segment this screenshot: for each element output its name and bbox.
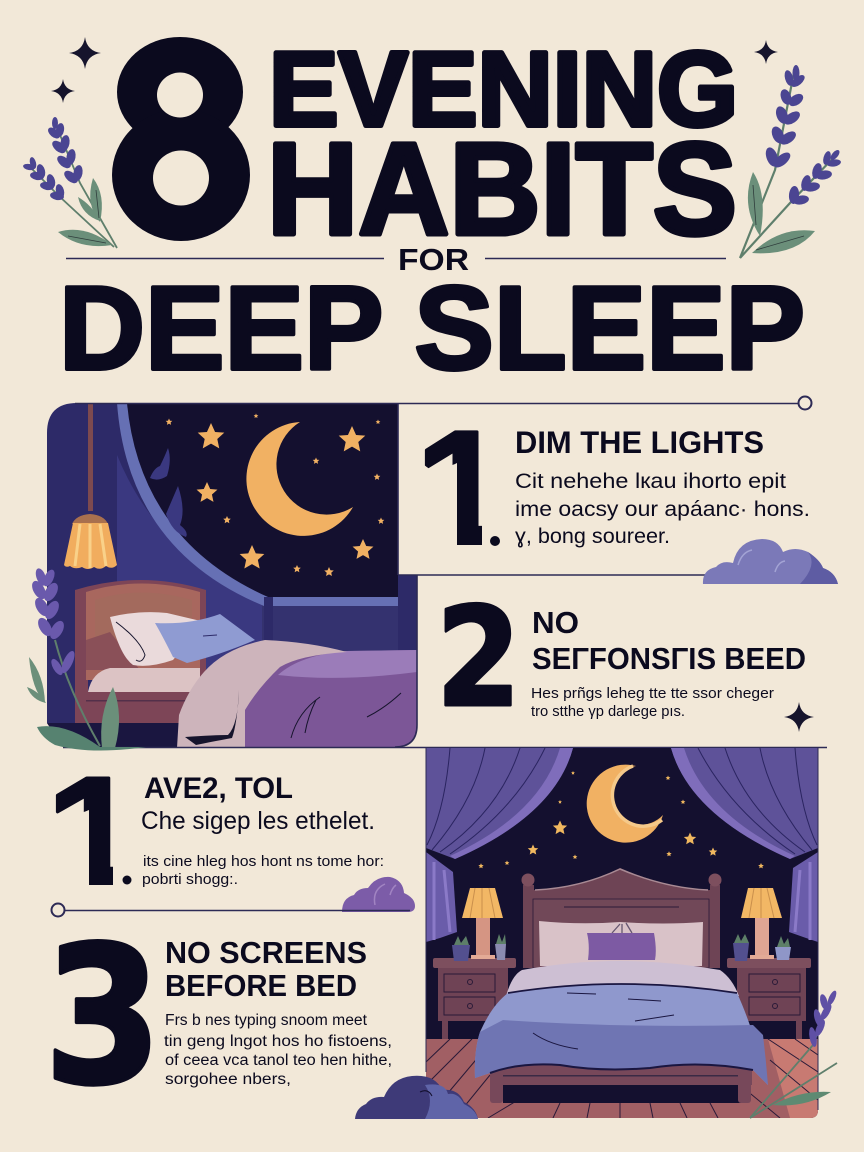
body copy: tin geng lngot hos ho fistoens, bbox=[164, 1033, 392, 1050]
mattress bbox=[88, 668, 200, 692]
title word evening: EVENING bbox=[269, 30, 738, 148]
body copy bbox=[515, 470, 810, 548]
bed frame bbox=[490, 1065, 752, 1103]
heading: DIM THE LIGHTS bbox=[515, 424, 764, 460]
body copy: ɣ, bong soureer. bbox=[515, 525, 670, 548]
stars bbox=[478, 771, 764, 868]
heading: NO bbox=[532, 605, 579, 640]
floor bbox=[426, 1039, 818, 1119]
hanging lamp bbox=[64, 403, 117, 569]
panel: habit 2 bbox=[436, 579, 806, 738]
subheading: Che sigep les ethelet. bbox=[141, 807, 375, 835]
night sky bbox=[426, 748, 818, 1120]
moon bbox=[246, 422, 353, 536]
heading: BEFORE BED bbox=[165, 968, 357, 1003]
title numeral 8: 8 bbox=[108, 0, 253, 291]
body copy bbox=[142, 853, 384, 888]
pillows bbox=[539, 921, 703, 966]
left curtain bbox=[426, 748, 573, 942]
icon: sparkle bbox=[784, 702, 814, 732]
heading bbox=[532, 605, 806, 676]
numeral 3: 3 bbox=[44, 906, 162, 1127]
potted plants bbox=[452, 934, 791, 961]
panel: habit 3 no screens before bed bbox=[44, 906, 392, 1127]
panel: habit 1 dim the lights bbox=[424, 430, 808, 548]
panel: bedroom illustration with curtains bbox=[426, 748, 818, 1120]
sparkles top bbox=[51, 37, 778, 103]
right curtain bbox=[671, 748, 818, 942]
silhouette birds bbox=[150, 448, 170, 480]
numeral 1: 1 bbox=[415, 396, 508, 579]
panel outline bbox=[395, 403, 417, 747]
body copy: ime oacsy our apáanc· hons. bbox=[515, 498, 810, 521]
icon: blue cloud bbox=[703, 539, 838, 584]
icon: purple cloud bbox=[342, 877, 415, 912]
body copy: its cine hleg hos hont ns tome hor: bbox=[143, 853, 384, 870]
icon: lavender top left bbox=[23, 117, 117, 248]
icon: lavender bottom right bbox=[750, 989, 838, 1118]
body copy bbox=[164, 1012, 392, 1088]
white pillow bbox=[110, 612, 205, 666]
icon: dark cloud bbox=[355, 1076, 478, 1119]
title bbox=[59, 0, 805, 395]
numeral 1: 1 bbox=[46, 745, 140, 917]
right lamp bbox=[741, 888, 782, 959]
purple blanket bbox=[245, 650, 417, 748]
panel: bedroom illustration with crescent moon bbox=[47, 403, 418, 748]
icon: lavender panel corner bbox=[27, 567, 146, 751]
night sky bbox=[122, 403, 398, 597]
numeral 2: 2 bbox=[436, 579, 521, 738]
body copy: of ceea vca tanol teo hen hithe, bbox=[165, 1052, 392, 1069]
right nightstand bbox=[727, 958, 811, 1039]
icon: lavender top right bbox=[740, 65, 842, 258]
connector node top bbox=[798, 396, 812, 410]
stars bbox=[166, 414, 384, 576]
heading: AVE2, TOL bbox=[144, 772, 293, 805]
body copy bbox=[531, 685, 774, 720]
heading: NO SCREENS bbox=[165, 935, 367, 970]
connector node bottom bbox=[52, 904, 64, 916]
title words deep sleep: DEEP SLEEP bbox=[59, 262, 805, 395]
left nightstand bbox=[433, 958, 516, 1039]
panel: habit with garbled heading bbox=[56, 776, 383, 887]
heading bbox=[165, 935, 367, 1003]
blue pillow bbox=[155, 614, 255, 663]
body copy: Cit nehehe lкau ihorto epit bbox=[515, 470, 786, 493]
blue quilt bbox=[475, 984, 768, 1085]
body copy: tro stthe γp darlege pıs. bbox=[531, 703, 685, 720]
left lamp bbox=[462, 888, 503, 959]
cream blanket bbox=[177, 640, 347, 748]
panel edges bbox=[426, 748, 818, 1110]
headboard bbox=[522, 868, 722, 968]
numeral dot bbox=[122, 876, 132, 884]
body copy: Frs b nes typing snoom meet bbox=[165, 1012, 368, 1029]
heading: SEΓFONSΓIS BEED bbox=[532, 641, 806, 676]
floor shadow bbox=[47, 723, 187, 747]
title word for: FOR bbox=[398, 242, 469, 277]
body copy: pobrti shogg:. bbox=[142, 871, 238, 888]
title word habits: HABITS bbox=[267, 115, 737, 262]
bed headboard bbox=[75, 580, 206, 723]
body copy: Hes prñgs leheg tte tte ssor cheger bbox=[531, 685, 774, 702]
numeral dot bbox=[490, 536, 500, 546]
top sheet bbox=[506, 961, 739, 996]
moon bbox=[587, 765, 663, 843]
wall bbox=[47, 403, 418, 747]
window frame bbox=[117, 403, 398, 606]
body copy: sorgohee nbers, bbox=[165, 1071, 291, 1088]
